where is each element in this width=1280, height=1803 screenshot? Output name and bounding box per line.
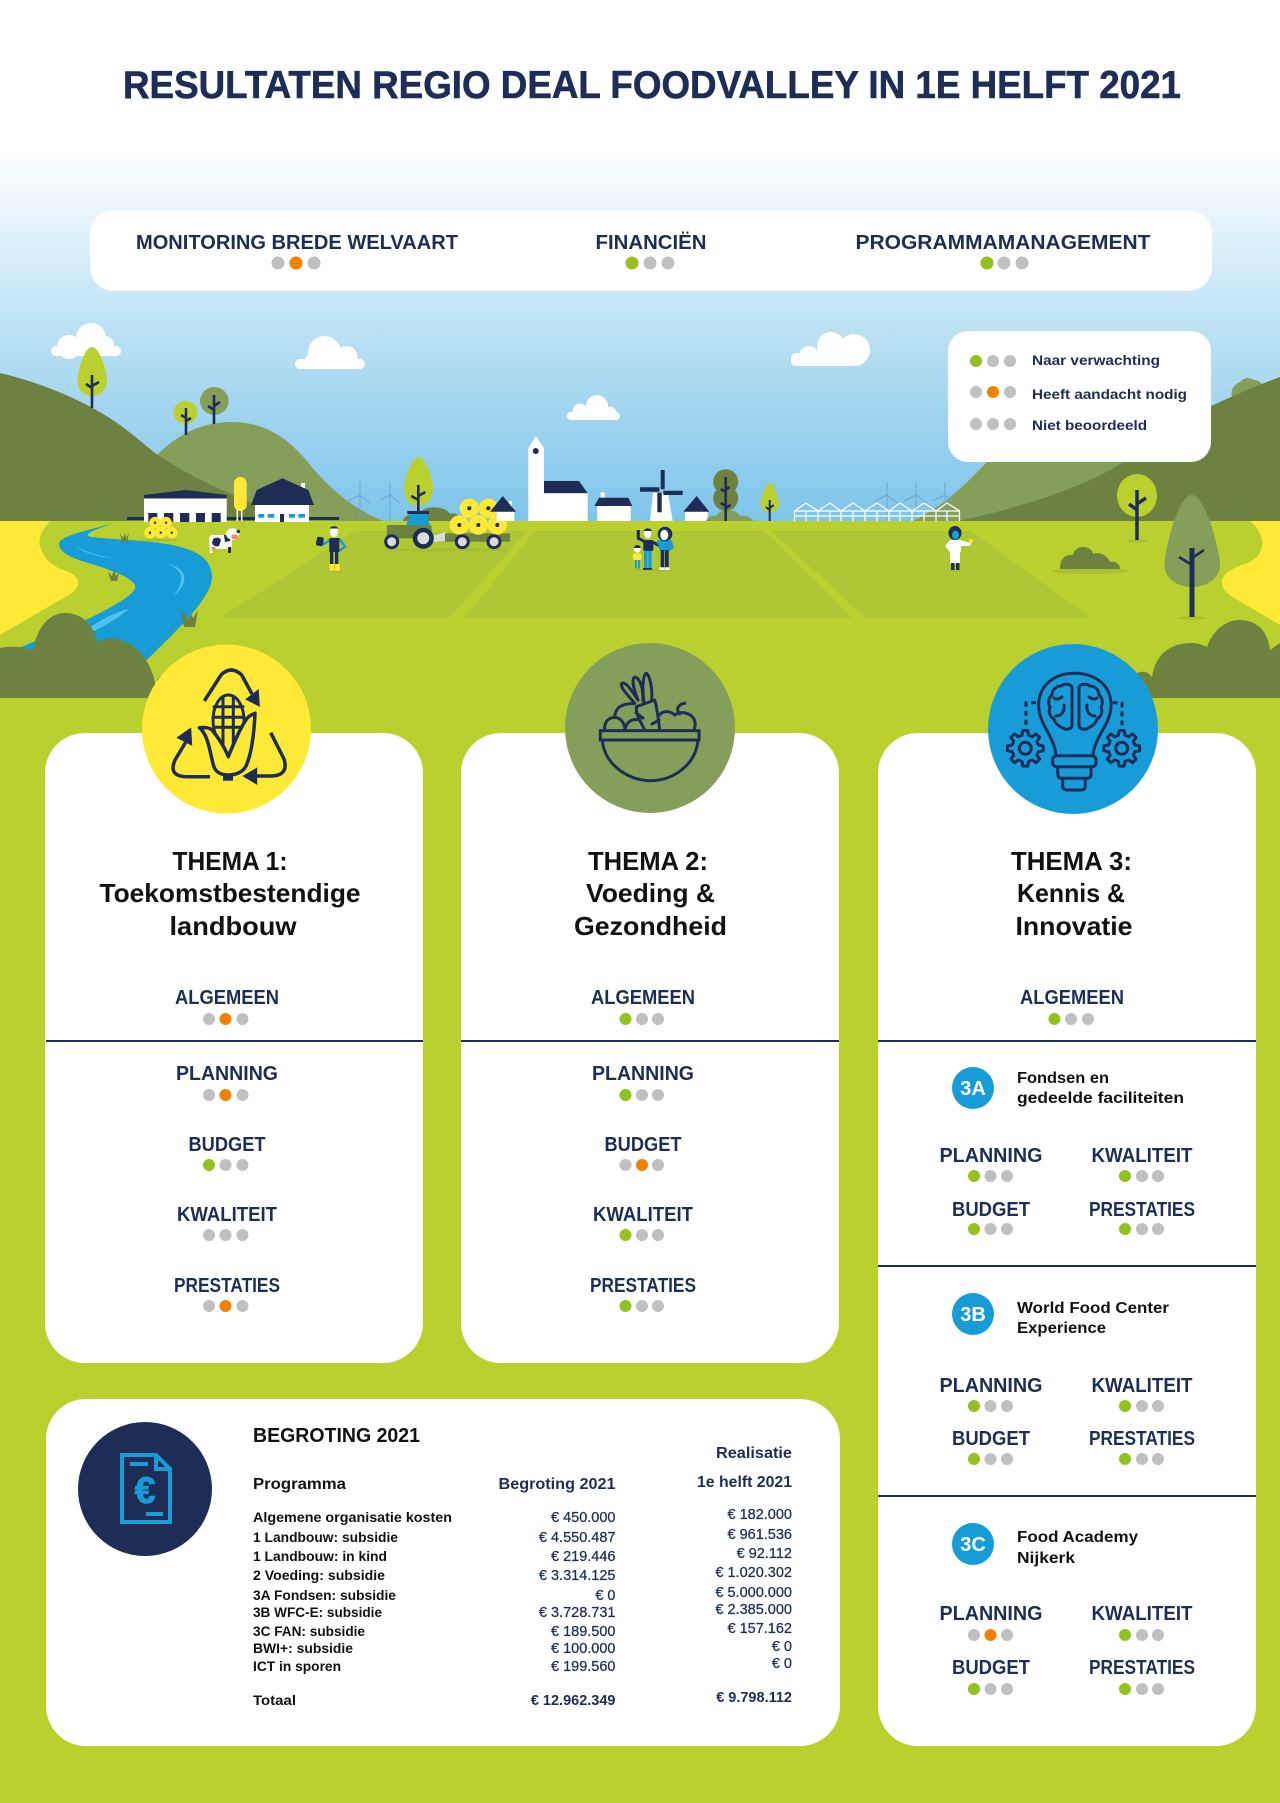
status: budget	[604, 1134, 682, 1171]
status 3A: kwaliteit: KWALITEIT	[1092, 1145, 1192, 1167]
status 3C: kwaliteit: KWALITEIT	[1092, 1603, 1192, 1625]
icon: euro document: €	[135, 1470, 155, 1511]
text: fondsen en gedeelde faciliteiten: Fondsen en	[1017, 1070, 1109, 1087]
text: food academy nijkerk: Food Academy	[1017, 1529, 1138, 1546]
wind turbines	[348, 482, 955, 521]
begroting values: € 3.314.125	[539, 1568, 616, 1584]
begroting values: € 100.000	[551, 1641, 616, 1657]
status: programmamanagement: PROGRAMMAMANAGEMENT	[856, 232, 1150, 254]
heading: thema 1: landbouw	[170, 911, 297, 941]
status: planning: PLANNING	[592, 1063, 694, 1085]
icon: light bulb with brain and gears	[988, 644, 1158, 814]
status 3B: planning: PLANNING	[940, 1375, 1042, 1397]
text: world food center experience: Experience	[1017, 1320, 1106, 1337]
status: algemeen	[1020, 987, 1124, 1025]
status: kwaliteit	[177, 1204, 277, 1241]
section 3B	[940, 1293, 1195, 1465]
icon: bowl of vegetables	[565, 643, 735, 813]
panel: top summary	[90, 210, 1212, 291]
poplar tree	[234, 477, 247, 521]
child	[633, 545, 642, 568]
realisatie values: € 961.536	[727, 1527, 792, 1543]
status: prestaties: PRESTATIES	[590, 1275, 696, 1297]
heading: thema 3: Kennis &	[1017, 878, 1125, 908]
realisatie values: € 0	[772, 1639, 792, 1655]
program names: 1 Landbouw: in kind	[253, 1548, 387, 1564]
badge 3B: 3B	[960, 1304, 986, 1326]
icon: euro document	[78, 1422, 212, 1556]
realisatie values: € 1.020.302	[715, 1565, 792, 1581]
text: world food center experience	[1017, 1300, 1169, 1337]
status 3B: prestaties	[1089, 1428, 1195, 1465]
heading: begroting 2021: BEGROTING 2021	[253, 1425, 420, 1447]
sky background	[0, 150, 1280, 525]
begroting values: € 219.446	[551, 1549, 616, 1565]
panel: begroting 2021	[46, 1399, 840, 1746]
status 3C: kwaliteit	[1092, 1603, 1192, 1641]
status: programmamanagement	[856, 232, 1150, 270]
farmhouse	[251, 478, 314, 522]
heading: thema 2: Gezondheid	[574, 911, 727, 941]
status: budget	[188, 1134, 266, 1171]
legend	[948, 331, 1211, 462]
panel: thema 2	[461, 643, 839, 1363]
status: financien: FINANCIËN	[596, 231, 706, 254]
greenhouses	[794, 503, 960, 521]
begroting values: € 3.728.731	[539, 1605, 616, 1621]
table: begroting	[253, 1445, 792, 1709]
realisatie values: € 182.000	[727, 1507, 792, 1523]
begroting values	[531, 1510, 616, 1709]
heading: thema 2	[574, 846, 727, 941]
realisatie values: € 92.112	[737, 1546, 792, 1562]
program names: 2 Voeding: subsidie	[253, 1567, 385, 1583]
status: kwaliteit	[593, 1204, 693, 1241]
status 3B: prestaties: PRESTATIES	[1089, 1428, 1195, 1450]
text: world food center experience: World Food Center	[1017, 1300, 1169, 1317]
icon: corn with recycling arrows	[142, 644, 311, 814]
heading: thema 3: Innovatie	[1016, 911, 1132, 941]
status: kwaliteit: KWALITEIT	[177, 1204, 277, 1226]
trees on the hills	[78, 347, 229, 435]
text: fondsen en gedeelde faciliteiten: gedeelde faciliteiten	[1017, 1090, 1184, 1107]
realisatie values: € 9.798.112	[716, 1690, 792, 1706]
legend: Naar verwachting	[1032, 352, 1160, 368]
text: food academy nijkerk: Nijkerk	[1017, 1550, 1075, 1567]
begroting values: € 4.550.487	[539, 1530, 616, 1546]
village trees and bushes	[706, 469, 779, 521]
realisatie values: € 0	[772, 1656, 792, 1672]
column headers: Begroting 2021	[498, 1476, 616, 1493]
column headers: Programma	[253, 1476, 346, 1493]
status: monitoring brede welvaart	[136, 232, 458, 270]
realisatie values: € 2.385.000	[715, 1602, 792, 1618]
crop fields	[220, 531, 1091, 618]
status 3A: prestaties	[1089, 1199, 1195, 1235]
badge 3C	[952, 1523, 994, 1565]
column headers	[253, 1445, 792, 1493]
status: budget: BUDGET	[604, 1134, 682, 1156]
grass tufts	[108, 533, 198, 627]
bush behind tractor	[403, 507, 462, 521]
begroting values: € 0	[595, 1588, 616, 1604]
woman	[657, 527, 674, 570]
title: RESULTATEN REGIO DEAL FOODVALLEY IN 1E HELFT 2021	[123, 64, 1181, 107]
scientist figure	[945, 526, 973, 572]
column headers: 1e helft 2021	[697, 1474, 792, 1491]
program names	[253, 1509, 452, 1708]
panel: thema 1	[45, 644, 423, 1363]
status 3C: planning	[940, 1603, 1042, 1641]
right side trees	[1052, 474, 1220, 620]
status 3A: prestaties: PRESTATIES	[1089, 1199, 1195, 1221]
yellow fields	[0, 521, 78, 635]
column headers: Realisatie	[716, 1445, 792, 1462]
status: prestaties: PRESTATIES	[174, 1275, 280, 1297]
family figures	[631, 527, 674, 572]
status 3A: planning	[940, 1145, 1042, 1182]
badge 3A: 3A	[960, 1078, 986, 1100]
status: planning	[592, 1063, 694, 1101]
heading: thema 3: THEMA 3:	[1011, 846, 1132, 876]
text: food academy nijkerk	[1017, 1529, 1138, 1567]
heading: thema 2: THEMA 2:	[588, 846, 708, 876]
status 3C: budget: BUDGET	[952, 1657, 1030, 1679]
program names: Totaal	[253, 1692, 296, 1708]
program names: 1 Landbouw: subsidie	[253, 1529, 398, 1545]
heading: thema 1: Toekomstbestendige	[100, 878, 360, 908]
village: church and houses	[490, 436, 709, 521]
farm barn	[127, 490, 339, 522]
status: planning	[176, 1063, 278, 1101]
status 3C: planning: PLANNING	[940, 1603, 1042, 1625]
status 3B: budget: BUDGET	[952, 1428, 1030, 1450]
status: algemeen	[175, 987, 279, 1025]
status 3A: planning: PLANNING	[940, 1145, 1042, 1167]
clouds	[51, 323, 870, 420]
status: algemeen: ALGEMEEN	[175, 987, 279, 1009]
program names: 3A Fondsen: subsidie	[253, 1587, 396, 1603]
begroting values: € 189.500	[551, 1624, 616, 1640]
status: monitoring brede welvaart: MONITORING BREDE WELVAART	[136, 232, 458, 254]
realisatie values	[715, 1507, 792, 1706]
hills	[157, 422, 384, 521]
status: algemeen	[591, 987, 695, 1025]
realisatie values: € 157.162	[727, 1621, 792, 1637]
status 3A: budget: BUDGET	[952, 1199, 1030, 1221]
foreground bushes	[0, 613, 1280, 698]
farmer figure	[316, 526, 345, 572]
status: prestaties	[174, 1275, 280, 1312]
program names: BWI+: subsidie	[253, 1640, 353, 1656]
program names: ICT in sporen	[253, 1658, 341, 1674]
program names: Algemene organisatie kosten	[253, 1509, 452, 1525]
status: financien	[596, 231, 706, 270]
river	[0, 522, 212, 660]
hay bales	[141, 517, 179, 542]
status 3B: planning	[940, 1375, 1042, 1412]
begroting values: € 12.962.349	[531, 1693, 616, 1709]
status: planning: PLANNING	[176, 1063, 278, 1085]
status 3C: prestaties	[1089, 1657, 1195, 1695]
heading: thema 2: Voeding &	[586, 878, 715, 908]
program names: 3C FAN: subsidie	[253, 1623, 365, 1639]
section 3C	[940, 1523, 1195, 1695]
realisatie values: € 5.000.000	[715, 1585, 792, 1601]
status 3C: budget	[952, 1657, 1030, 1695]
status 3A: budget	[952, 1199, 1030, 1235]
status: algemeen: ALGEMEEN	[1020, 987, 1124, 1009]
panel: thema 3	[878, 644, 1256, 1746]
section 3A	[940, 1067, 1195, 1235]
status 3B: budget	[952, 1428, 1030, 1465]
badge 3A	[952, 1067, 994, 1109]
badge 3B	[952, 1293, 994, 1335]
heading: thema 3	[1011, 846, 1132, 941]
badge 3C: 3C	[960, 1534, 986, 1556]
man	[638, 528, 660, 570]
status 3A: kwaliteit	[1092, 1145, 1192, 1182]
text: fondsen en gedeelde faciliteiten	[1017, 1070, 1184, 1107]
tractor and hay trailer	[383, 457, 513, 552]
legend: Heeft aandacht nodig	[1032, 386, 1187, 402]
heading: thema 1	[100, 846, 360, 941]
status 3B: kwaliteit: KWALITEIT	[1092, 1375, 1192, 1397]
status: budget: BUDGET	[188, 1134, 266, 1156]
status: prestaties	[590, 1275, 696, 1312]
status: kwaliteit: KWALITEIT	[593, 1204, 693, 1226]
cow	[209, 528, 240, 553]
legend: Niet beoordeeld	[1032, 417, 1147, 433]
status 3C: prestaties: PRESTATIES	[1089, 1657, 1195, 1679]
status 3B: kwaliteit	[1092, 1375, 1192, 1412]
begroting values: € 450.000	[551, 1510, 616, 1526]
begroting values: € 199.560	[551, 1659, 616, 1675]
ground	[0, 521, 1280, 1803]
program names: 3B WFC-E: subsidie	[253, 1604, 382, 1620]
heading: thema 1: THEMA 1:	[172, 846, 288, 876]
status: algemeen: ALGEMEEN	[591, 987, 695, 1009]
